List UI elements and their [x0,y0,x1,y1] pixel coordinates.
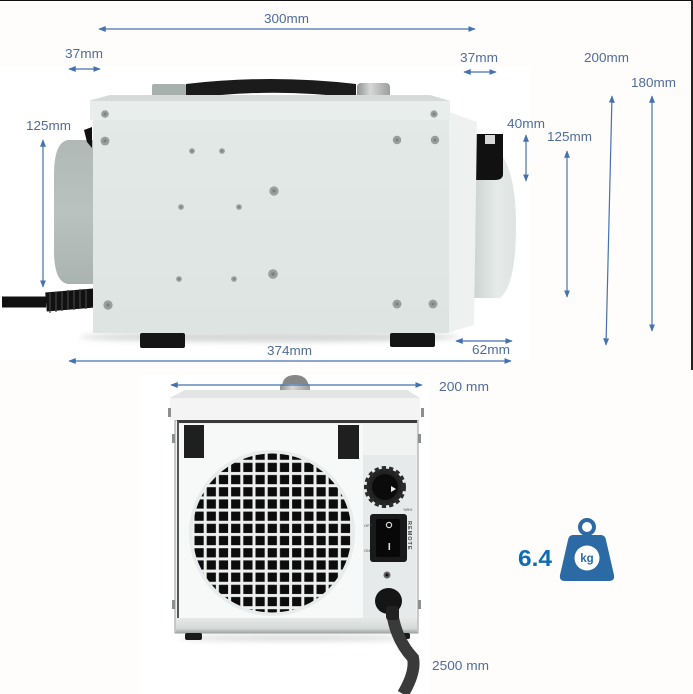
jack [384,572,390,578]
switch labels: ON [364,548,370,553]
power cable [2,289,94,313]
dimension: 300mm: 300mm [264,11,309,26]
switch labels: %RH [403,507,412,512]
main face [93,120,449,333]
dimension: 125mm left: 125mm [26,118,71,133]
front view dehumidifier [168,375,424,694]
handle strap [186,79,356,99]
remote label: REMOTE [406,521,412,551]
dial [366,468,404,506]
dimension: 62mm [456,341,512,357]
dimension: 200 mm width: 200 mm [439,379,489,394]
dimension: 62mm: 62mm [472,342,510,357]
right side panel [447,112,477,333]
icon: weight: kg [580,553,594,565]
small screws [176,148,242,282]
dimension: 37mm right [460,50,498,72]
fan panel [179,424,363,618]
dimension: 200mm height: 200mm [584,50,629,65]
dark inner edge [177,420,417,423]
lid [170,390,420,420]
frame edges [0,0,693,370]
side screws [168,408,424,609]
feet [185,633,410,640]
right cylinder [474,150,516,298]
large screws [101,110,439,310]
handle mounts [152,83,390,100]
dimension: 374mm: 374mm [267,343,312,358]
bracket label [485,135,495,144]
image backdrop [0,67,530,694]
fan grille [189,450,355,616]
rocker switch [370,514,407,562]
black bracket [476,134,503,180]
dimension: 37mm left [65,46,103,69]
dimension: 200mm height [584,50,629,345]
switch labels [364,507,412,553]
top knob [280,375,310,400]
feet [140,333,435,348]
floor shadow [178,635,414,641]
left cylinder [54,140,94,284]
weight value: 6.4 [518,545,552,571]
dimension: 2500 mm cable: 2500 mm [432,658,489,673]
plug and cable [375,588,414,694]
icon: weight [560,520,614,581]
dimension: 40mm: 40mm [507,116,545,131]
dimension: 37mm left: 37mm [65,46,103,61]
side view dehumidifier [2,79,516,348]
switch labels: OFF [364,523,373,528]
top lid [90,95,450,120]
dimension: 40mm [507,116,545,181]
back clip [84,127,92,148]
bracket clips [184,425,359,459]
shadow [80,332,460,342]
dimension: 125mm right: 125mm [547,129,592,144]
dimension: 37mm right: 37mm [460,50,498,65]
bottom rail [176,618,417,633]
control panel [363,424,416,618]
dimension: 180mm: 180mm [631,75,676,90]
body [175,420,418,633]
